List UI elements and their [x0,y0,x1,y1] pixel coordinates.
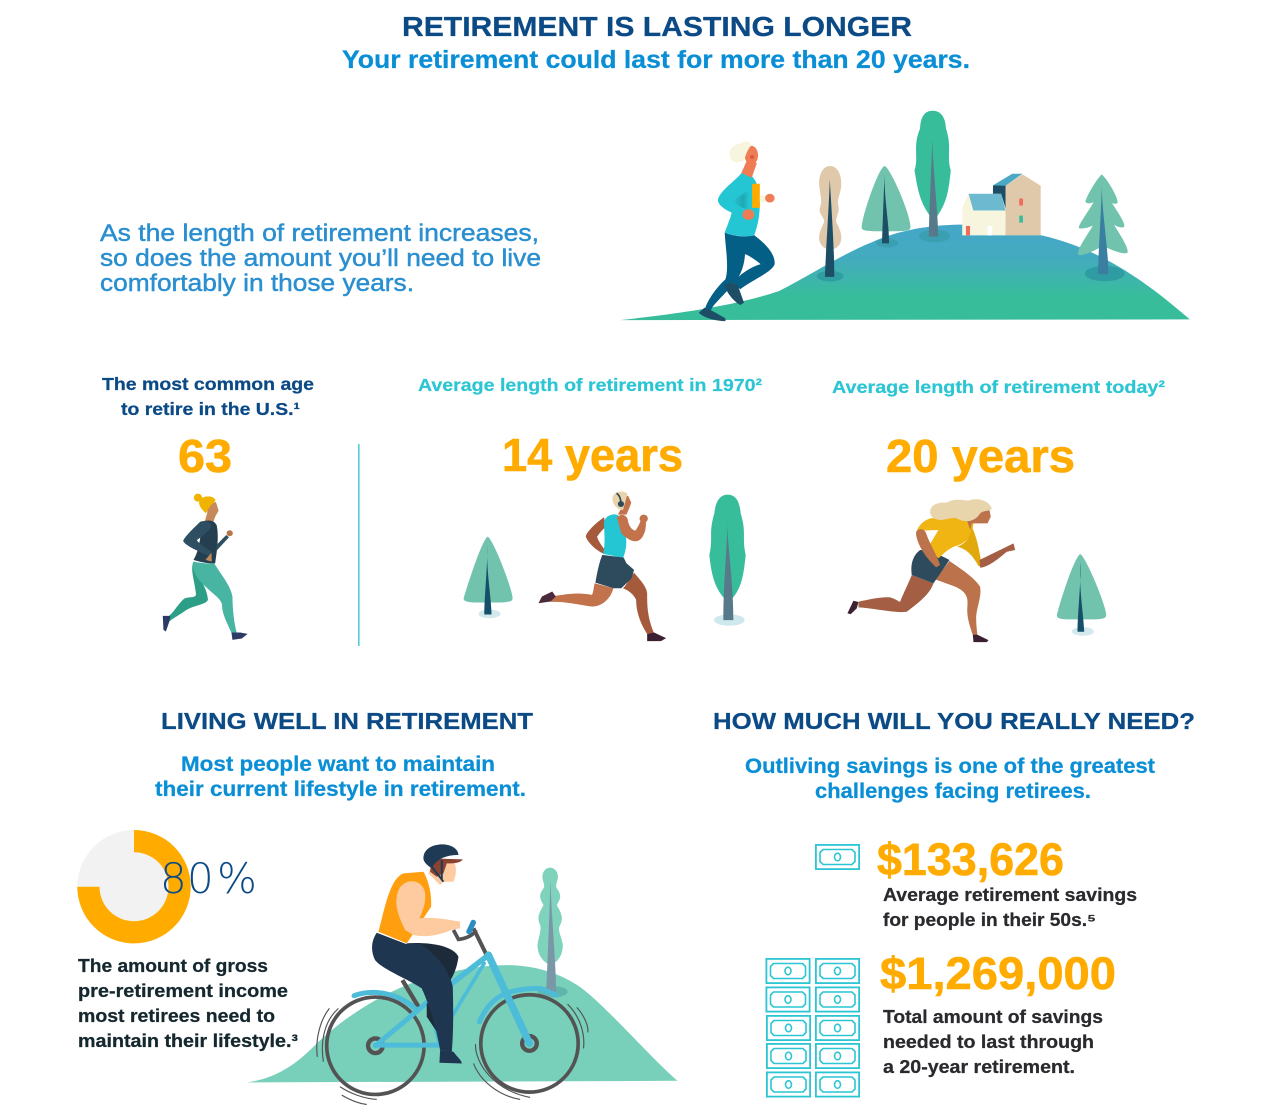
icon: cyclist [372,844,463,1063]
icon: beige tree [817,166,843,282]
text block: average savings [883,885,1137,930]
text block: gross income: The amount of gross [78,956,268,976]
heading: how much: HOW MUCH WILL YOU REALLY NEED? [713,708,1195,734]
icon: older runner [699,141,775,321]
text block: gross income: most retirees need to [78,1006,275,1026]
icon: single bill [816,845,859,869]
icon: hill [620,225,1190,320]
stat: 20 years: 20 years [886,430,1075,482]
text block: total savings: Total amount of savings [883,1007,1103,1027]
icon: stack of bills [766,959,859,1097]
label: most common age: to retire in the U.S.¹ [121,399,300,419]
illustration: woman jogger and tree, second runner [163,491,666,641]
icon: pine tree [1078,174,1128,281]
icon: tall tree [915,111,951,242]
icon: triangle tree [464,537,513,618]
stat: 63: 63 [178,430,232,482]
stat: 14 years: 14 years [502,429,683,481]
label: most common age: The most common age [102,374,314,394]
donut chart 80 percent [77,830,191,943]
text block: gross income [78,956,298,1051]
text block: total savings: a 20-year retirement. [883,1057,1075,1077]
icon: tall tree [709,495,746,626]
icon: woman jogger [163,494,248,640]
illustration: tall tree, sprinter and small tree [709,495,1106,642]
icon: bicycle [317,919,588,1104]
label: retirement length 1970: Average length of retirement in 1970² [418,375,762,395]
stat: average savings: $133,626 [877,834,1064,885]
icon: triangle tree [1057,554,1106,636]
icon: hill [247,965,678,1082]
subtitle: Your retirement could last for more than 20 years. [342,46,970,74]
text block: average savings: for people in their 50s.⁵ [883,910,1096,930]
icon: tree [537,868,568,997]
subheading: outliving savings [745,755,1155,803]
icon: triangle tree [862,166,910,247]
text block: total savings [883,1007,1103,1077]
subheading: outliving savings: challenges facing retirees. [815,780,1091,803]
icon: sprinter [847,499,1015,642]
intro text block: As the length of retirement increases, [100,220,539,247]
illustration: runner on hill with house and trees [620,111,1190,321]
intro text block: comfortably in those years. [100,270,414,297]
stat: 80%: 80% [160,854,257,903]
subheading: lifestyle [155,753,526,801]
text block: average savings: Average retirement savings [883,885,1137,905]
subheading: lifestyle: their current lifestyle in retirement. [155,778,526,801]
intro text block [100,220,541,297]
icon: runner with headphones [538,491,666,641]
label: most common age [102,374,314,419]
stat: total savings: $1,269,000 [880,948,1116,999]
label: retirement length today: Average length of retirement today² [832,377,1165,397]
text block: total savings: needed to last through [883,1032,1094,1052]
intro text block: so does the amount you’ll need to live [100,245,541,272]
subheading: outliving savings: Outliving savings is one of the greatest [745,755,1155,778]
illustration: cyclist on hill [247,844,678,1104]
text block: gross income: pre-retirement income [78,981,288,1001]
title: RETIREMENT IS LASTING LONGER [402,11,912,42]
subheading: lifestyle: Most people want to maintain [181,753,495,776]
text block: gross income: maintain their lifestyle.³ [78,1031,298,1051]
heading: living well: LIVING WELL IN RETIREMENT [161,708,533,734]
icon: house [962,174,1041,235]
